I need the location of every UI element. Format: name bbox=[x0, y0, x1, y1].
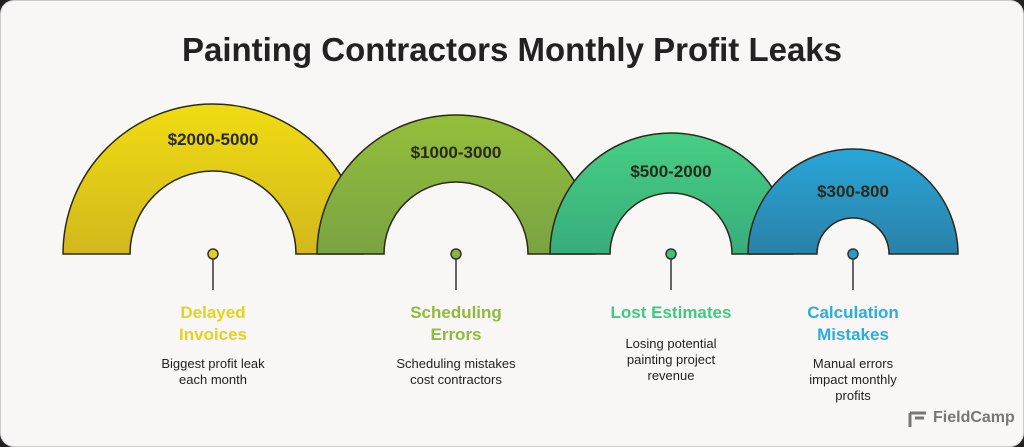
logo: FieldCamp: FieldCamp bbox=[933, 409, 1015, 426]
arch 2 bbox=[317, 115, 595, 254]
arch 4: $300-800 bbox=[817, 182, 889, 201]
label 4 bbox=[807, 303, 899, 403]
label 2: Scheduling bbox=[410, 303, 502, 322]
pins bbox=[208, 249, 858, 290]
arch 3 bbox=[550, 133, 792, 254]
label 1: Biggest profit leak bbox=[161, 356, 265, 371]
label 2 bbox=[396, 303, 516, 387]
arch 2: $1000-3000 bbox=[411, 143, 501, 162]
arch 4 bbox=[748, 149, 958, 254]
label 2: Errors bbox=[430, 325, 482, 344]
arch 1 bbox=[63, 104, 363, 254]
label 3: painting project bbox=[627, 352, 715, 367]
arch 1: $2000-5000 bbox=[168, 130, 258, 149]
label 4: Mistakes bbox=[817, 325, 889, 344]
label 3: Losing potential bbox=[625, 336, 717, 351]
label 1: each month bbox=[179, 372, 247, 387]
label 3: revenue bbox=[648, 368, 694, 383]
label 2: cost contractors bbox=[410, 372, 502, 387]
label 3: Lost Estimates bbox=[611, 303, 731, 322]
label 4: Calculation bbox=[807, 303, 899, 322]
label 1: Invoices bbox=[179, 325, 247, 344]
arch 3: $500-2000 bbox=[630, 162, 712, 181]
label 2: Scheduling mistakes bbox=[396, 356, 516, 371]
label 3 bbox=[611, 303, 731, 383]
label 1: Delayed bbox=[180, 303, 246, 322]
label 1 bbox=[161, 303, 265, 387]
label 4: profits bbox=[835, 388, 871, 403]
label 4: Manual errors bbox=[813, 356, 893, 371]
title: Painting Contractors Monthly Profit Leaks bbox=[182, 31, 842, 68]
label 4: impact monthly bbox=[809, 372, 897, 387]
